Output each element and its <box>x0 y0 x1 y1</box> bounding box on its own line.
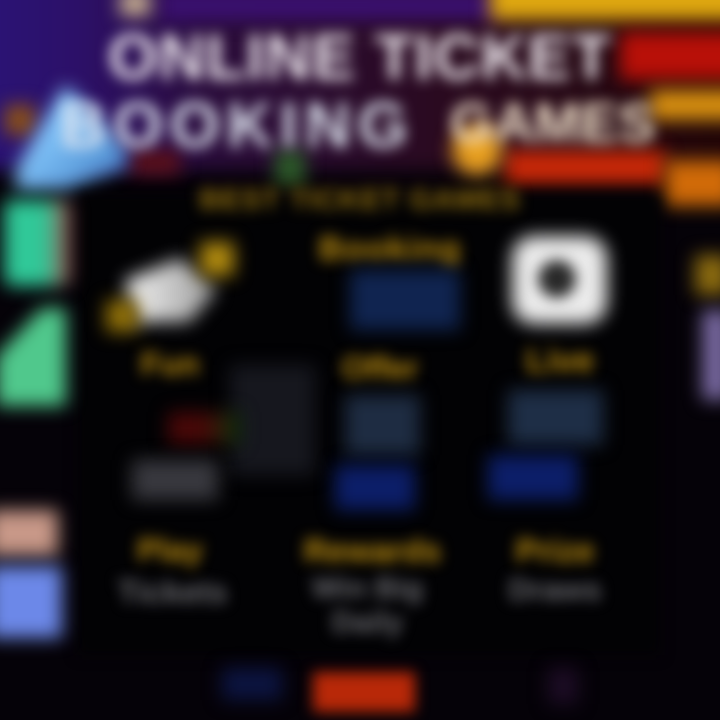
title <box>55 21 663 161</box>
column two blue panel <box>335 465 415 510</box>
column one bottom text: Tickets <box>118 574 227 610</box>
column three grey panel <box>508 390 603 445</box>
column three logo center <box>538 260 576 298</box>
left icon: peach block <box>0 510 58 556</box>
column one bottom heading: Play <box>137 532 203 568</box>
column three label: Live <box>526 342 594 380</box>
column two bottom heading: Rewards <box>304 532 441 569</box>
column three blue panel <box>488 455 578 500</box>
icon: blue triangle <box>2 76 140 202</box>
title line one: ONLINE TICKET <box>108 21 612 93</box>
main panel <box>78 195 660 655</box>
column three logo <box>512 236 607 324</box>
right edge decoration <box>665 160 720 206</box>
footer blue button <box>222 668 282 700</box>
column two heading: Booking <box>318 230 461 268</box>
header background <box>0 0 720 196</box>
column two grey panel <box>345 395 420 455</box>
column three bottom text: Draws <box>508 572 602 607</box>
footer red button <box>313 672 415 712</box>
column three bottom heading: Prize <box>516 532 594 569</box>
column two bottom text: Daily <box>332 606 403 639</box>
column two bottom text <box>306 570 429 642</box>
column one flag accent <box>168 412 240 444</box>
column two bottom text: Win Big <box>312 572 423 605</box>
column two label: Offer <box>342 350 418 386</box>
title line two: BOOKING <box>60 89 415 161</box>
column one accent <box>200 242 234 276</box>
right edge marks <box>695 255 720 295</box>
title accent word: GAMES <box>450 91 655 154</box>
column one small accent <box>106 300 138 332</box>
left icon: tricolor flag <box>4 200 70 286</box>
column one feature label: Fun <box>141 346 199 382</box>
column two image <box>350 270 460 330</box>
left icon: blue block <box>0 566 62 638</box>
panel heading: BEST TICKET GAMES <box>199 184 521 216</box>
footer purple mark <box>548 668 578 704</box>
left icon: green triangle <box>0 294 80 420</box>
column one logo <box>112 247 226 336</box>
icon: orange glow <box>452 125 502 175</box>
right edge icon <box>702 310 720 400</box>
column one text block <box>230 365 315 475</box>
column one grey label <box>132 460 218 500</box>
